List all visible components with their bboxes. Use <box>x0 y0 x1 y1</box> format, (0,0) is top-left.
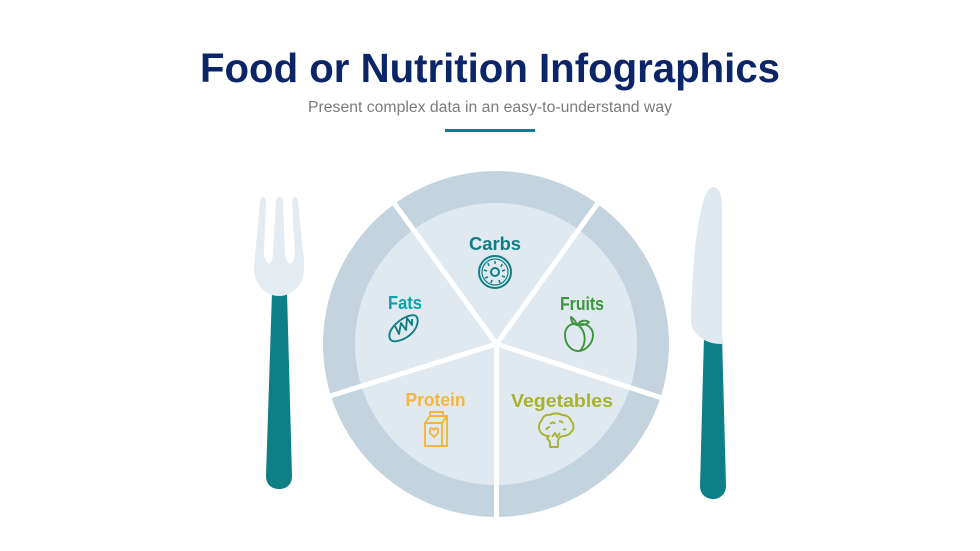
plate <box>323 171 669 519</box>
label: vegetables: Vegetables <box>511 391 613 411</box>
icon: peach <box>565 317 593 351</box>
label: carbs: Carbs <box>469 234 521 254</box>
label: protein: Protein <box>406 390 466 410</box>
icon: broccoli <box>539 414 573 447</box>
label: fats: Fats <box>388 293 422 313</box>
icon: knife <box>691 187 726 499</box>
icon: fork <box>254 197 304 489</box>
icon: donut <box>479 256 511 288</box>
title underline <box>445 129 535 132</box>
subtitle: Present complex data in an easy-to-understand way <box>308 99 672 116</box>
title: Food or Nutrition Infographics <box>200 45 780 91</box>
plate centre <box>355 203 637 485</box>
icon: bread <box>389 315 418 341</box>
slice dividers <box>330 203 662 519</box>
plate rim <box>323 171 669 517</box>
label: fruits: Fruits <box>560 294 604 314</box>
icon: milk carton <box>425 412 447 446</box>
